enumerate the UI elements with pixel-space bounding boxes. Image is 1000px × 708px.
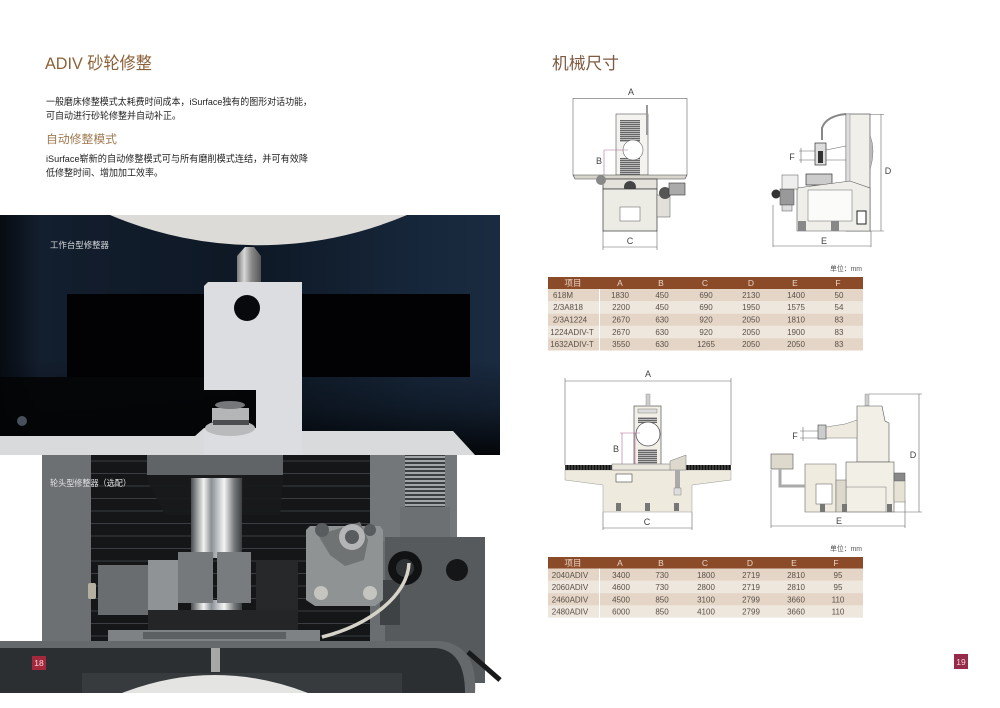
upper clamp xyxy=(147,455,283,515)
table: large machine dimensions: 2060ADIV xyxy=(552,583,589,592)
table: small machine dimensions: 2050 xyxy=(787,340,805,349)
table: small machine dimensions: 618M xyxy=(553,291,573,300)
diagram: large machine side view: D xyxy=(910,450,917,460)
text block: intro: 可自动进行砂轮修整并自动补正。 xyxy=(46,110,181,122)
black recess behind dresser xyxy=(67,294,470,377)
table: large machine dimensions: 2040ADIV xyxy=(552,571,589,580)
diagram: large machine front view: A xyxy=(645,369,651,379)
diagram: small machine side view: F xyxy=(789,152,795,162)
text block: automatic mode description xyxy=(46,153,308,179)
white wheel segment xyxy=(122,675,308,693)
table: small machine dimensions: 项目 xyxy=(564,278,582,288)
diagram: small machine side view: D xyxy=(885,166,892,176)
table: large machine dimensions: B xyxy=(658,558,664,568)
table: small machine dimensions: 1830 xyxy=(611,291,629,300)
table: small machine dimensions: C xyxy=(702,278,708,288)
table: small machine dimensions: 690 xyxy=(699,303,713,312)
diagram: large machine front view xyxy=(565,369,731,530)
table: large machine dimensions: 110 xyxy=(832,608,845,616)
left and centre blocks xyxy=(88,552,298,615)
panel: left page photo, table-type dresser xyxy=(0,215,500,455)
table: small machine dimensions: E xyxy=(792,278,798,288)
diagram: small machine side view: E xyxy=(821,236,827,246)
table: small machine dimensions: 2200 xyxy=(612,303,630,312)
table: large machine dimensions: 2799 xyxy=(742,608,760,616)
page number 18 xyxy=(32,656,46,670)
lower frame xyxy=(0,641,475,693)
table: small machine dimensions: 83 xyxy=(835,340,844,349)
diagram: small machine front view xyxy=(573,87,687,250)
table: small machine dimensions: 3550 xyxy=(612,340,630,349)
table: large machine dimensions: 2810 xyxy=(787,583,805,592)
table: small machine dimensions: 83 xyxy=(835,328,844,337)
diagram: small machine front view: C xyxy=(627,236,634,246)
table: small machine dimensions: F xyxy=(835,278,841,288)
table: large machine dimensions: 4500 xyxy=(612,596,630,604)
table: large machine dimensions: 6000 xyxy=(612,608,630,616)
table: small machine dimensions: 690 xyxy=(699,291,713,300)
table: large machine dimensions: D xyxy=(747,558,753,568)
dresser pin xyxy=(237,247,261,282)
page number 19 xyxy=(954,654,968,669)
table: large machine dimensions: 110 xyxy=(832,596,845,604)
table: large machine dimensions: 2719 xyxy=(742,583,760,592)
white machine base xyxy=(0,428,475,455)
table: large machine dimensions: 95 xyxy=(834,571,843,580)
table: small machine dimensions: 920 xyxy=(699,316,713,324)
table: small machine dimensions: 2/3A818 xyxy=(553,303,583,312)
table: large machine dimensions: 730 xyxy=(655,583,669,592)
table: small machine dimensions: 1810 xyxy=(787,316,805,324)
table: large machine dimensions: 1800 xyxy=(697,571,715,580)
table: small machine dimensions: 2670 xyxy=(612,316,630,324)
table: large machine dimensions: 850 xyxy=(655,608,669,616)
table: small machine dimensions: 450 xyxy=(655,303,669,312)
table: small machine dimensions: 1265 xyxy=(697,340,715,349)
black cable xyxy=(468,652,500,680)
grinding wheel xyxy=(110,215,407,245)
diagram: large machine front view: B xyxy=(613,444,619,454)
text block: intro: 一般磨床修整模式太耗费时间成本，iSurface独有的图形对话功能， xyxy=(46,96,312,108)
panel: left page photo, wheel-head dresser xyxy=(0,455,500,693)
hole in block xyxy=(234,295,260,321)
spring conduit xyxy=(405,455,445,510)
table: small machine dimensions: 83 xyxy=(835,316,844,324)
table: large machine dimensions: 4600 xyxy=(612,583,630,592)
unit label, table 1: 单位：mm xyxy=(830,263,862,273)
dresser block xyxy=(204,282,302,455)
photo caption: wheel-head dresser: 轮头型修整器（选配） xyxy=(50,478,131,488)
table: small machine dimensions: 2050 xyxy=(742,328,760,337)
table: small machine dimensions: 2670 xyxy=(612,328,630,337)
bolt and nut xyxy=(205,401,255,436)
table: large machine dimensions: C xyxy=(702,558,708,568)
table: small machine dimensions: 1400 xyxy=(787,291,805,300)
title: machine dimensions: 机械尺寸 xyxy=(552,54,619,73)
page number 18: 18 xyxy=(34,658,44,668)
vertical shaft xyxy=(190,475,243,503)
table: small machine dimensions: 1224ADIV-T xyxy=(550,328,594,337)
table: large machine dimensions: 项目 xyxy=(564,558,582,568)
diagram: small machine side view xyxy=(772,114,892,247)
unit label, table 2: 单位：mm xyxy=(830,543,862,553)
table: small machine dimensions: D xyxy=(748,278,754,288)
text block: automatic mode description: 低修整时间、增加加工效率。 xyxy=(46,167,163,179)
heading: automatic dressing mode: 自动修整模式 xyxy=(46,132,118,146)
table: small machine dimensions: 630 xyxy=(655,328,669,337)
table: large machine dimensions: 2719 xyxy=(742,571,760,580)
lower pin xyxy=(211,648,220,672)
table: large machine dimensions xyxy=(548,557,863,618)
table: small machine dimensions: 2/3A1224 xyxy=(553,316,588,324)
table: small machine dimensions: 450 xyxy=(655,291,669,300)
table: small machine dimensions: 630 xyxy=(655,316,669,324)
table: large machine dimensions: 2810 xyxy=(787,571,805,580)
table: small machine dimensions: 1632ADIV-T xyxy=(550,340,594,349)
diagram: large machine side view xyxy=(771,394,922,528)
table: small machine dimensions xyxy=(548,277,863,350)
table: small machine dimensions: 2050 xyxy=(742,340,760,349)
table: large machine dimensions: 3400 xyxy=(612,571,630,580)
right mounting plate xyxy=(385,537,485,683)
diagram: large machine side view: E xyxy=(836,516,842,526)
diagram: large machine front view: C xyxy=(644,517,651,527)
diagram: large machine side view: F xyxy=(792,431,798,441)
table: small machine dimensions: 50 xyxy=(835,291,844,300)
table: large machine dimensions: 850 xyxy=(655,596,669,604)
table: large machine dimensions: 95 xyxy=(834,583,843,592)
table: small machine dimensions: 1900 xyxy=(787,328,805,337)
table: small machine dimensions: 920 xyxy=(699,328,713,337)
table: large machine dimensions: 3660 xyxy=(787,596,805,604)
title: grinding wheel dressing: ADIV 砂轮修整 xyxy=(45,54,152,73)
photo caption: table-type dresser: 工作台型修整器 xyxy=(50,240,109,250)
table: large machine dimensions: E xyxy=(791,558,797,568)
diagram: small machine front view: B xyxy=(596,156,602,166)
text block: automatic mode description: iSurface崭新的自动修整模式可与所有磨削模式连结，并可有效降 xyxy=(46,153,308,165)
table: small machine dimensions: 54 xyxy=(835,303,844,312)
switch plate with knob xyxy=(306,522,383,606)
table: small machine dimensions: 2130 xyxy=(742,291,760,300)
table: large machine dimensions: 4100 xyxy=(697,608,715,616)
table: large machine dimensions: 2460ADIV xyxy=(552,596,589,604)
table: small machine dimensions: 2050 xyxy=(742,316,760,324)
table: small machine dimensions: 630 xyxy=(655,340,669,349)
table: small machine dimensions: 1575 xyxy=(787,303,805,312)
striped dark background xyxy=(91,455,370,642)
table: large machine dimensions: 3100 xyxy=(697,596,715,604)
table: large machine dimensions: 730 xyxy=(655,571,669,580)
dresser disc xyxy=(108,630,320,642)
table: large machine dimensions: 2799 xyxy=(742,596,760,604)
page number 19: 19 xyxy=(956,657,966,667)
grommet and screw xyxy=(388,551,422,585)
table: large machine dimensions: 2800 xyxy=(697,583,715,592)
table: small machine dimensions: B xyxy=(658,278,664,288)
table: small machine dimensions: A xyxy=(617,278,623,288)
table: small machine dimensions: 1950 xyxy=(742,303,760,312)
table: large machine dimensions: 3660 xyxy=(787,608,805,616)
table: large machine dimensions: F xyxy=(833,558,839,568)
table: large machine dimensions: A xyxy=(617,558,623,568)
white cable xyxy=(322,563,409,637)
text block: intro xyxy=(46,96,312,122)
diagram: small machine front view: A xyxy=(628,87,634,97)
table: large machine dimensions: 2480ADIV xyxy=(552,608,589,616)
